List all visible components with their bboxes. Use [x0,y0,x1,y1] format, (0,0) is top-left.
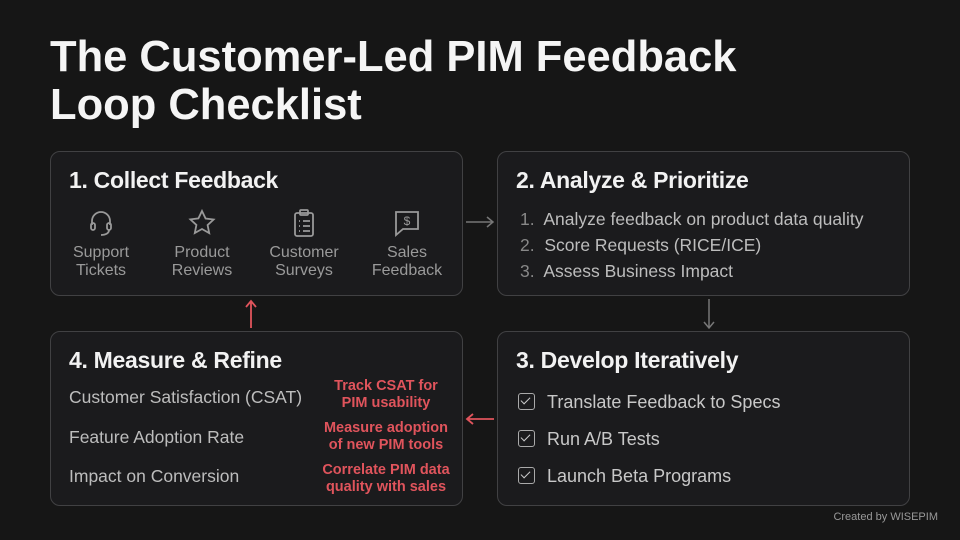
heading: analyze: 2. Analyze & Prioritize [516,167,749,193]
title [50,33,736,129]
icon: customer surveys: Surveys [275,262,333,279]
red note 2: of new PIM tools [329,437,443,453]
icon: sales feedback: Sales [387,244,427,261]
icon: customer surveys: Customer [269,244,339,261]
credit: Created by WISEPIM [833,511,938,523]
icon: support tickets [73,211,129,279]
red notes: Track CSAT for [334,378,438,394]
heading: develop: 3. Develop Iteratively [516,347,738,373]
list: analyze steps [520,209,864,281]
red note 3: Correlate PIM data [322,462,450,478]
heading: collect: 1. Collect Feedback [69,167,278,193]
metrics list: Impact on Conversion [69,466,239,486]
icon: sales feedback: Feedback [372,262,442,279]
metrics list [69,387,302,486]
red notes [334,378,438,411]
icon: product reviews: Reviews [172,262,232,279]
icon: support tickets: Tickets [76,262,126,279]
red note 3 [322,462,450,495]
arrow: 2 to 3 [704,299,714,329]
panel: collect feedback [50,151,463,296]
checklist [518,392,780,486]
icon: customer surveys [269,209,339,279]
list: analyze steps: 3. Assess Business Impact [520,261,733,281]
icon: product reviews: Product [174,244,230,261]
red note 2 [324,420,448,453]
list: analyze steps: 2. Score Requests (RICE/ICE) [520,235,761,255]
red notes: PIM usability [342,395,430,411]
checklist: Run A/B Tests [547,429,660,449]
arrow: 4 to 1 [245,300,257,328]
title: The Customer-Led PIM Feedback [50,33,736,81]
icon: product reviews [172,209,232,279]
checklist: Translate Feedback to Specs [547,392,780,412]
icon: sales feedback: $ [404,214,411,228]
list: analyze steps: 1. Analyze feedback on product data quality [520,209,863,229]
panel: develop [497,331,910,506]
panel: measure [50,331,463,506]
arrow: 1 to 2 [466,216,494,228]
icon: sales feedback [372,211,442,279]
title: Loop Checklist [50,81,362,129]
metrics list: Customer Satisfaction (CSAT) [69,387,302,407]
icon: support tickets: Support [73,244,129,261]
panel: analyze [497,151,910,296]
red note 3: quality with sales [326,479,446,495]
checklist: Launch Beta Programs [547,466,731,486]
heading: measure: 4. Measure & Refine [69,347,282,373]
metrics list: Feature Adoption Rate [69,426,244,446]
arrow: 3 to 4 [466,413,494,425]
red note 2: Measure adoption [324,420,448,436]
